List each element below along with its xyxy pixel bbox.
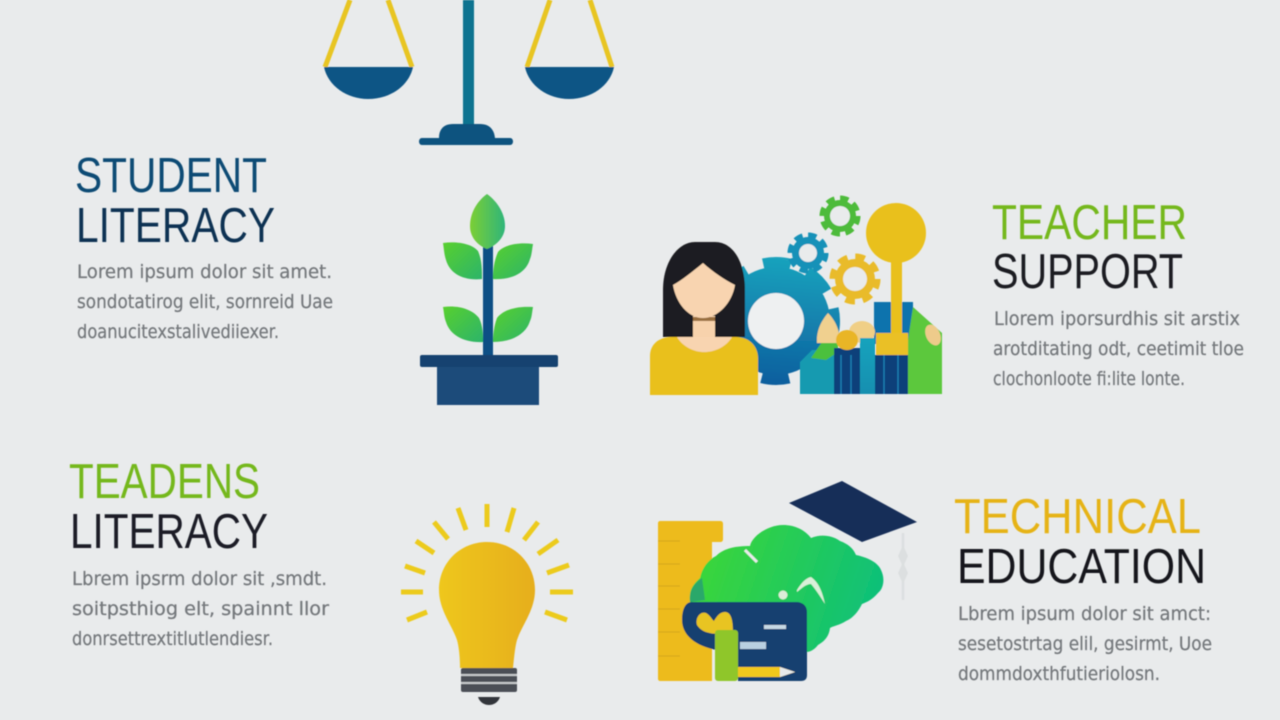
text block: student literacy body: doanucitexstalivediiexer. [77,321,279,343]
text block: teacher support body: clochonloote fi:lite lonte. [993,368,1185,390]
ruler [658,521,723,681]
teacher figure [650,242,758,395]
heading: student literacy: STUDENT [75,149,267,203]
small green gear [823,199,857,233]
big blue gear [719,264,833,378]
text block: student literacy body [77,261,333,343]
heading: technical education: TECHNICAL [954,490,1201,544]
text block: technical education body [958,603,1212,685]
panel: teacher support [992,196,1244,390]
heading: teacher support: TEACHER [992,196,1187,250]
heading: teacher support [992,196,1187,299]
heading: teadens literacy: TEADENS [69,455,260,509]
text block: teacher support body: Llorem iporsurdhis sit arstix [994,308,1240,330]
heading: technical education [954,490,1206,594]
heading: student literacy: LITERACY [76,199,275,253]
heading: teadens literacy [69,455,268,559]
bulb rays [401,504,573,620]
icon: education collage [658,481,917,681]
heading: technical education: EDUCATION [957,540,1206,594]
text block: technical education body: dommdoxthfutieriolosn. [958,663,1160,685]
icon: light bulb [401,504,573,705]
text block: teadens literacy body [72,568,329,650]
heading: teacher support: SUPPORT [992,245,1183,299]
text block: technical education body: sesetostrtag elil, gesirmt, Uoe [958,633,1212,655]
text block: student literacy body: sondotatirog elit, sornreid Uae [77,291,333,313]
panel: technical education [954,490,1212,685]
heading: teadens literacy: LITERACY [70,505,268,559]
small teal gear [791,236,825,270]
green brain [690,525,883,652]
text block: teadens literacy body: soitpsthiog elt, spainnt llor [72,598,329,620]
icon: teacher with gears and books [650,199,944,395]
books and hands [800,302,944,394]
panel: student literacy [75,149,333,343]
navy tablet [682,602,807,681]
text block: technical education body: Lbrem ipsum dolor sit amct: [958,603,1211,625]
graduation cap [789,481,917,600]
icon: potted plant [420,194,558,405]
heading: student literacy [75,149,275,253]
text block: teacher support body: arotditating odt, ceetimit tloe [993,338,1244,360]
yellow trophy pin [866,203,926,355]
text block: student literacy body: Lorem ipsum dolor sit amet. [77,261,332,283]
text block: teadens literacy body: donrsettrextitlutlendiesr. [72,628,273,650]
panel: teadens literacy [69,455,329,650]
text block: teadens literacy body: Lbrem ipsrm dolor sit ,smdt. [72,568,327,590]
text block: teacher support body [993,308,1244,390]
small yellow gear [833,257,877,301]
icon: balance scale [324,0,614,145]
